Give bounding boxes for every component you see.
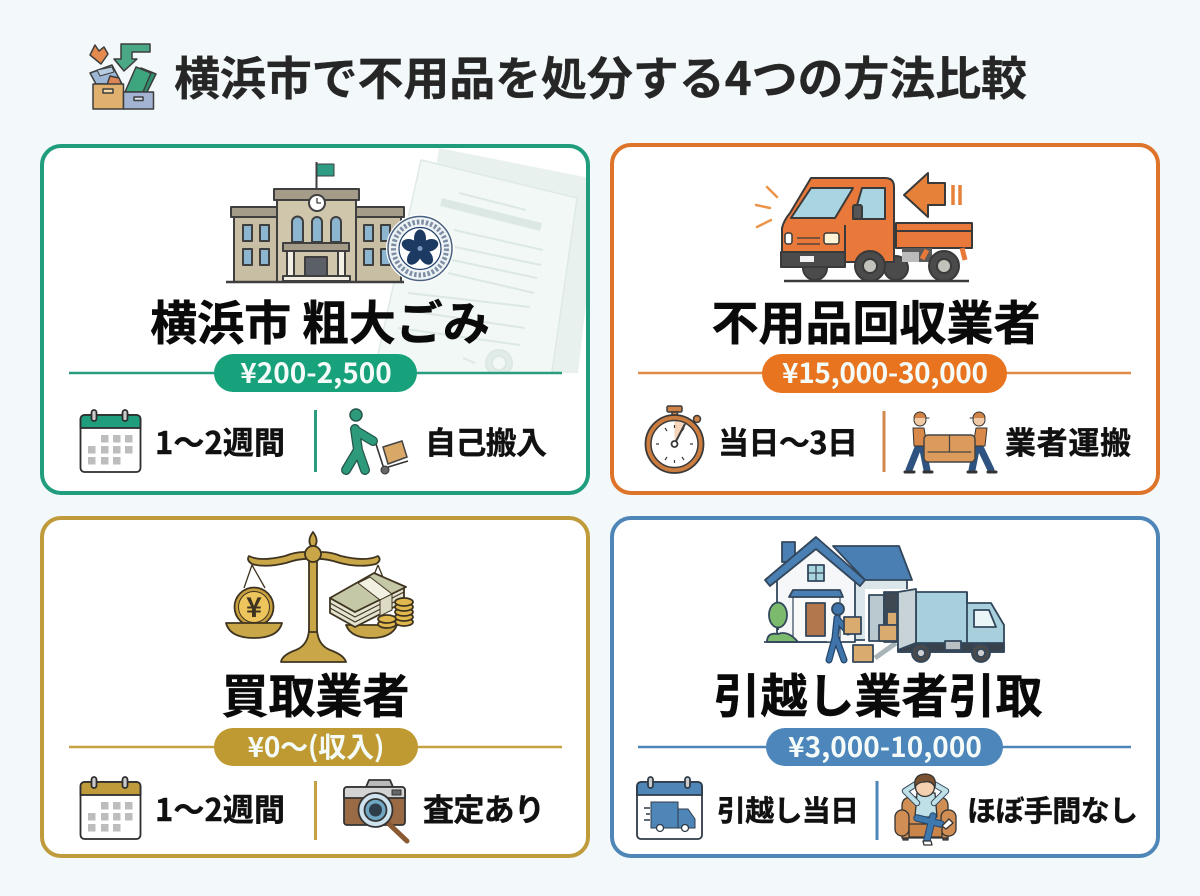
background documents [378, 148, 586, 373]
panel: 買取業者 [42, 518, 588, 856]
method text: 自己搬入 [425, 418, 547, 463]
icon: boxes with arrow [90, 44, 156, 109]
icon: house, mover and truck [764, 537, 1004, 662]
icon: city seal [386, 214, 454, 282]
duration text: 当日〜3日 [718, 418, 858, 463]
price divider line [69, 372, 562, 374]
heading: 買取業者 [222, 658, 410, 727]
price badge: ¥15,000-30,000 [782, 352, 988, 392]
timing text: 引越し当日 [717, 788, 859, 830]
price divider line [638, 372, 1131, 374]
price divider line [638, 746, 1131, 748]
price badge [214, 726, 418, 766]
title: 横浜市で不用品を処分する4つの方法比較 [174, 43, 1027, 109]
heading: 横浜市 粗大ごみ [150, 285, 490, 354]
method text: ほぼ手間なし [967, 788, 1138, 830]
icon: calendar with truck [637, 777, 702, 839]
icon: orange kei truck [756, 173, 972, 281]
price badge: ¥200-2,500 [240, 352, 392, 392]
icon: balance scale with coin and cash: ¥ [246, 586, 262, 625]
price badge: ¥0〜(収入) [248, 726, 384, 766]
icon: balance scale with coin and cash [226, 532, 413, 662]
price divider line [69, 746, 562, 748]
icon: camera with magnifier [344, 780, 407, 841]
method text: 査定あり [423, 785, 545, 830]
duration text: 1〜2週間 [155, 418, 285, 463]
icon: relaxed person on armchair [895, 774, 956, 845]
panel: 不用品回収業者 [612, 145, 1158, 493]
method text: 業者運搬 [1005, 418, 1131, 463]
panel: 引越し業者引取 [612, 518, 1158, 856]
icon: calendar [80, 410, 140, 472]
panel: 横浜市 粗大ごみ [42, 146, 600, 493]
price badge: ¥3,000-10,000 [788, 726, 982, 766]
icon: person with hand cart [346, 409, 408, 474]
icon: stopwatch [646, 406, 704, 473]
duration text: 1〜2週間 [155, 785, 285, 830]
heading: 不用品回収業者 [712, 285, 1040, 354]
icon: calendar [80, 777, 140, 839]
icon: two movers carrying sofa [905, 412, 996, 472]
icon: city hall building [226, 162, 404, 282]
heading: 引越し業者引取 [714, 658, 1042, 727]
